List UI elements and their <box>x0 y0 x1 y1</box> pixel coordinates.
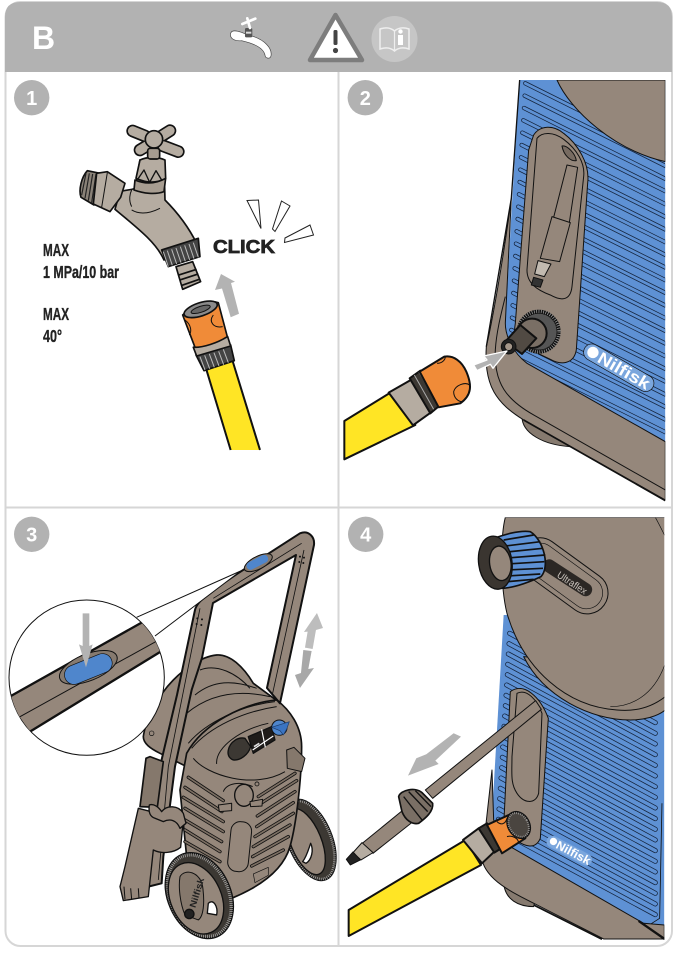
rear wheel <box>274 792 346 888</box>
blue release button <box>242 550 275 575</box>
lance recess <box>504 688 548 846</box>
illustration: tap <box>80 131 201 289</box>
header <box>32 15 418 62</box>
blue adjustment knob <box>475 531 545 591</box>
step number 4 <box>348 517 383 552</box>
label: max temperature: 40° <box>43 326 62 346</box>
Ultraflex label plate <box>534 537 609 614</box>
callout pointer lines <box>137 571 241 636</box>
hose with orange coupler <box>344 356 470 459</box>
arrow: pull out <box>408 733 461 776</box>
grey top cover <box>557 80 665 162</box>
icon: warning triangle <box>310 15 362 60</box>
step number 4: 4 <box>360 524 372 546</box>
illustration: hose with orange coupler <box>182 298 260 450</box>
label: max temperature <box>43 304 69 346</box>
lance <box>346 701 541 865</box>
panel 3: extend handle <box>7 517 346 949</box>
panel 2: hose to machine inlet <box>344 80 670 501</box>
accessory holder <box>120 757 186 901</box>
arrow: move handle up and down <box>295 613 323 688</box>
main body <box>180 700 302 898</box>
label: max pressure <box>43 240 119 282</box>
lance storage recess <box>514 127 588 363</box>
section letter B: B <box>32 20 55 56</box>
reel housing <box>143 655 278 767</box>
step number 2: 2 <box>360 88 371 110</box>
front wheel: Nilfisk <box>188 877 206 909</box>
label: max pressure: MAX <box>43 240 69 260</box>
Nilfisk badge: Nilfisk <box>594 348 654 394</box>
vertical divider <box>338 72 340 946</box>
header band <box>5 2 672 72</box>
step number 1: 1 <box>26 88 37 110</box>
illustration: pressure washer <box>7 532 346 949</box>
Ultraflex label plate: Ultraflex <box>555 570 589 597</box>
control panel <box>228 720 289 760</box>
grey base <box>482 770 665 939</box>
arrow: push up <box>215 274 239 317</box>
label: max temperature: MAX <box>43 304 69 324</box>
icon: read manual <box>372 16 418 62</box>
grey base <box>486 80 665 501</box>
step number 3 <box>14 517 49 552</box>
illustration: machine with hose and lance <box>346 517 665 939</box>
illustration: machine side <box>344 80 670 501</box>
hose with orange coupler <box>349 808 535 936</box>
step number 3: 3 <box>26 524 37 546</box>
handle frame <box>148 532 314 887</box>
blue ribbed panel <box>505 80 670 447</box>
magnified button callout <box>7 600 164 755</box>
body contours <box>188 702 285 780</box>
label: click: CLICK <box>213 237 275 257</box>
icon: water tap <box>230 18 271 58</box>
label: max pressure: 1 MPa/10 bar <box>43 262 119 282</box>
step number 1 <box>14 80 49 115</box>
Nilfisk badge <box>583 344 654 392</box>
panel 1: connect hose to tap <box>14 80 314 450</box>
vents <box>183 773 297 866</box>
step number 2 <box>348 80 383 115</box>
front wheel <box>153 842 246 949</box>
horizontal divider <box>5 506 672 508</box>
label: click <box>213 200 314 257</box>
arrow: push in <box>474 351 507 371</box>
Nilfisk badge: Nilfisk <box>554 838 593 868</box>
hose reel disc <box>502 517 665 720</box>
lamp and fittings <box>218 747 305 883</box>
water inlet connector <box>501 311 559 354</box>
blue ribbed panel <box>492 610 664 925</box>
panel 4: pull out lance <box>346 517 665 939</box>
